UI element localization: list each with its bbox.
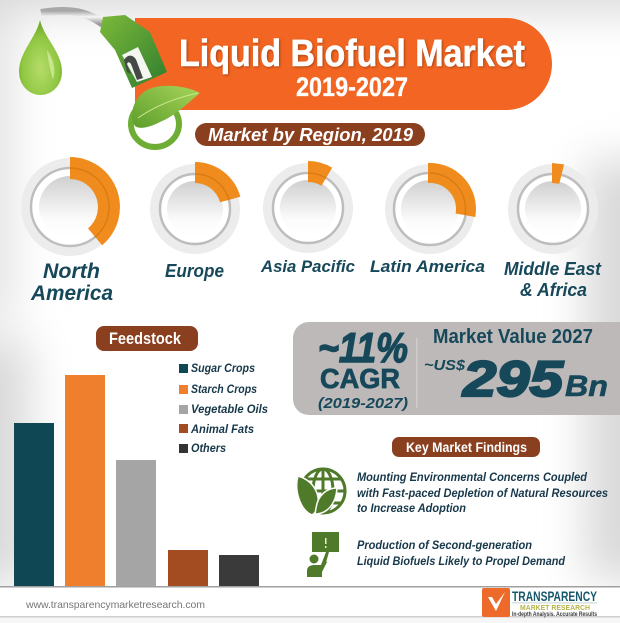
- label: Middle East and Africa: & Africa: [520, 280, 587, 300]
- text: finding one: Mounting Environmental Concerns Coupled: [357, 470, 588, 484]
- donut: Europe: [150, 162, 240, 254]
- text: finding two: Production of Second-generation: [357, 538, 532, 552]
- text: finding one: to Increase Adoption: [357, 501, 466, 515]
- heading pill: Market by Region: Market by Region, 2019: [208, 125, 413, 145]
- label: Middle East and Africa: Middle East: [504, 259, 602, 279]
- panel: CAGR and market value: [293, 322, 620, 415]
- market value unit: Bn: [565, 370, 608, 403]
- market value number: 295: [462, 351, 564, 407]
- donut: Latin America: [385, 163, 476, 254]
- text: finding two: Liquid Biofuels Likely to Propel Demand: [357, 554, 566, 568]
- icon: globe with leaves: [297, 469, 345, 515]
- icon: person holding sign: [307, 532, 339, 577]
- chart legend: Animal Fats: [190, 422, 254, 436]
- heading pill: Feedstock: Feedstock: [109, 329, 181, 348]
- subtitle years: 2019-2027: [296, 72, 408, 102]
- logo: Transparency Market Research: [482, 588, 597, 618]
- heading pill: Feedstock: [96, 326, 198, 351]
- chart legend: Starch Crops: [191, 382, 257, 396]
- label: North America: North: [43, 260, 100, 283]
- footer band: [0, 586, 620, 623]
- title: Liquid Biofuel Market: Liquid Biofuel Market: [179, 33, 525, 75]
- logo: Transparency Market Research: MARKET RESEARCH: [520, 603, 590, 612]
- chart legend: [179, 361, 268, 455]
- CAGR period: (2019-2027): [318, 395, 408, 412]
- title banner: [135, 18, 552, 110]
- label: North America: America: [30, 282, 113, 305]
- chart legend: Sugar Crops: [191, 361, 255, 375]
- title shadow: Liquid Biofuel Market: [180, 34, 526, 76]
- label: Latin America: Latin America: [370, 257, 485, 276]
- logo: Transparency Market Research: In-depth Analysis. Accurate Results: [512, 611, 597, 618]
- donut: Asia Pacific: [263, 161, 353, 253]
- CAGR label: CAGR: [320, 363, 400, 394]
- donut: Middle East and Africa: [508, 163, 598, 254]
- bar chart: feedstock: [14, 375, 259, 586]
- market value heading: Market Value 2027: [433, 326, 593, 348]
- icon: fuel nozzle hose: [41, 11, 103, 24]
- icon: fuel nozzle with leaf: [100, 15, 200, 147]
- label: Asia Pacific: Asia Pacific: [260, 257, 356, 276]
- label: Europe: Europe: [165, 261, 224, 281]
- CAGR value: ~11%: [318, 324, 408, 371]
- donut: North America: [21, 157, 120, 256]
- icon: fuel drop: [19, 20, 62, 95]
- chart legend: Vegetable Oils: [191, 402, 268, 416]
- chart legend: Others: [191, 441, 226, 455]
- website url: www.transparencymarketresearch.com: [25, 599, 205, 611]
- heading pill: Key Market Findings: Key Market Findings: [406, 439, 527, 455]
- currency prefix: ~US$: [424, 357, 466, 374]
